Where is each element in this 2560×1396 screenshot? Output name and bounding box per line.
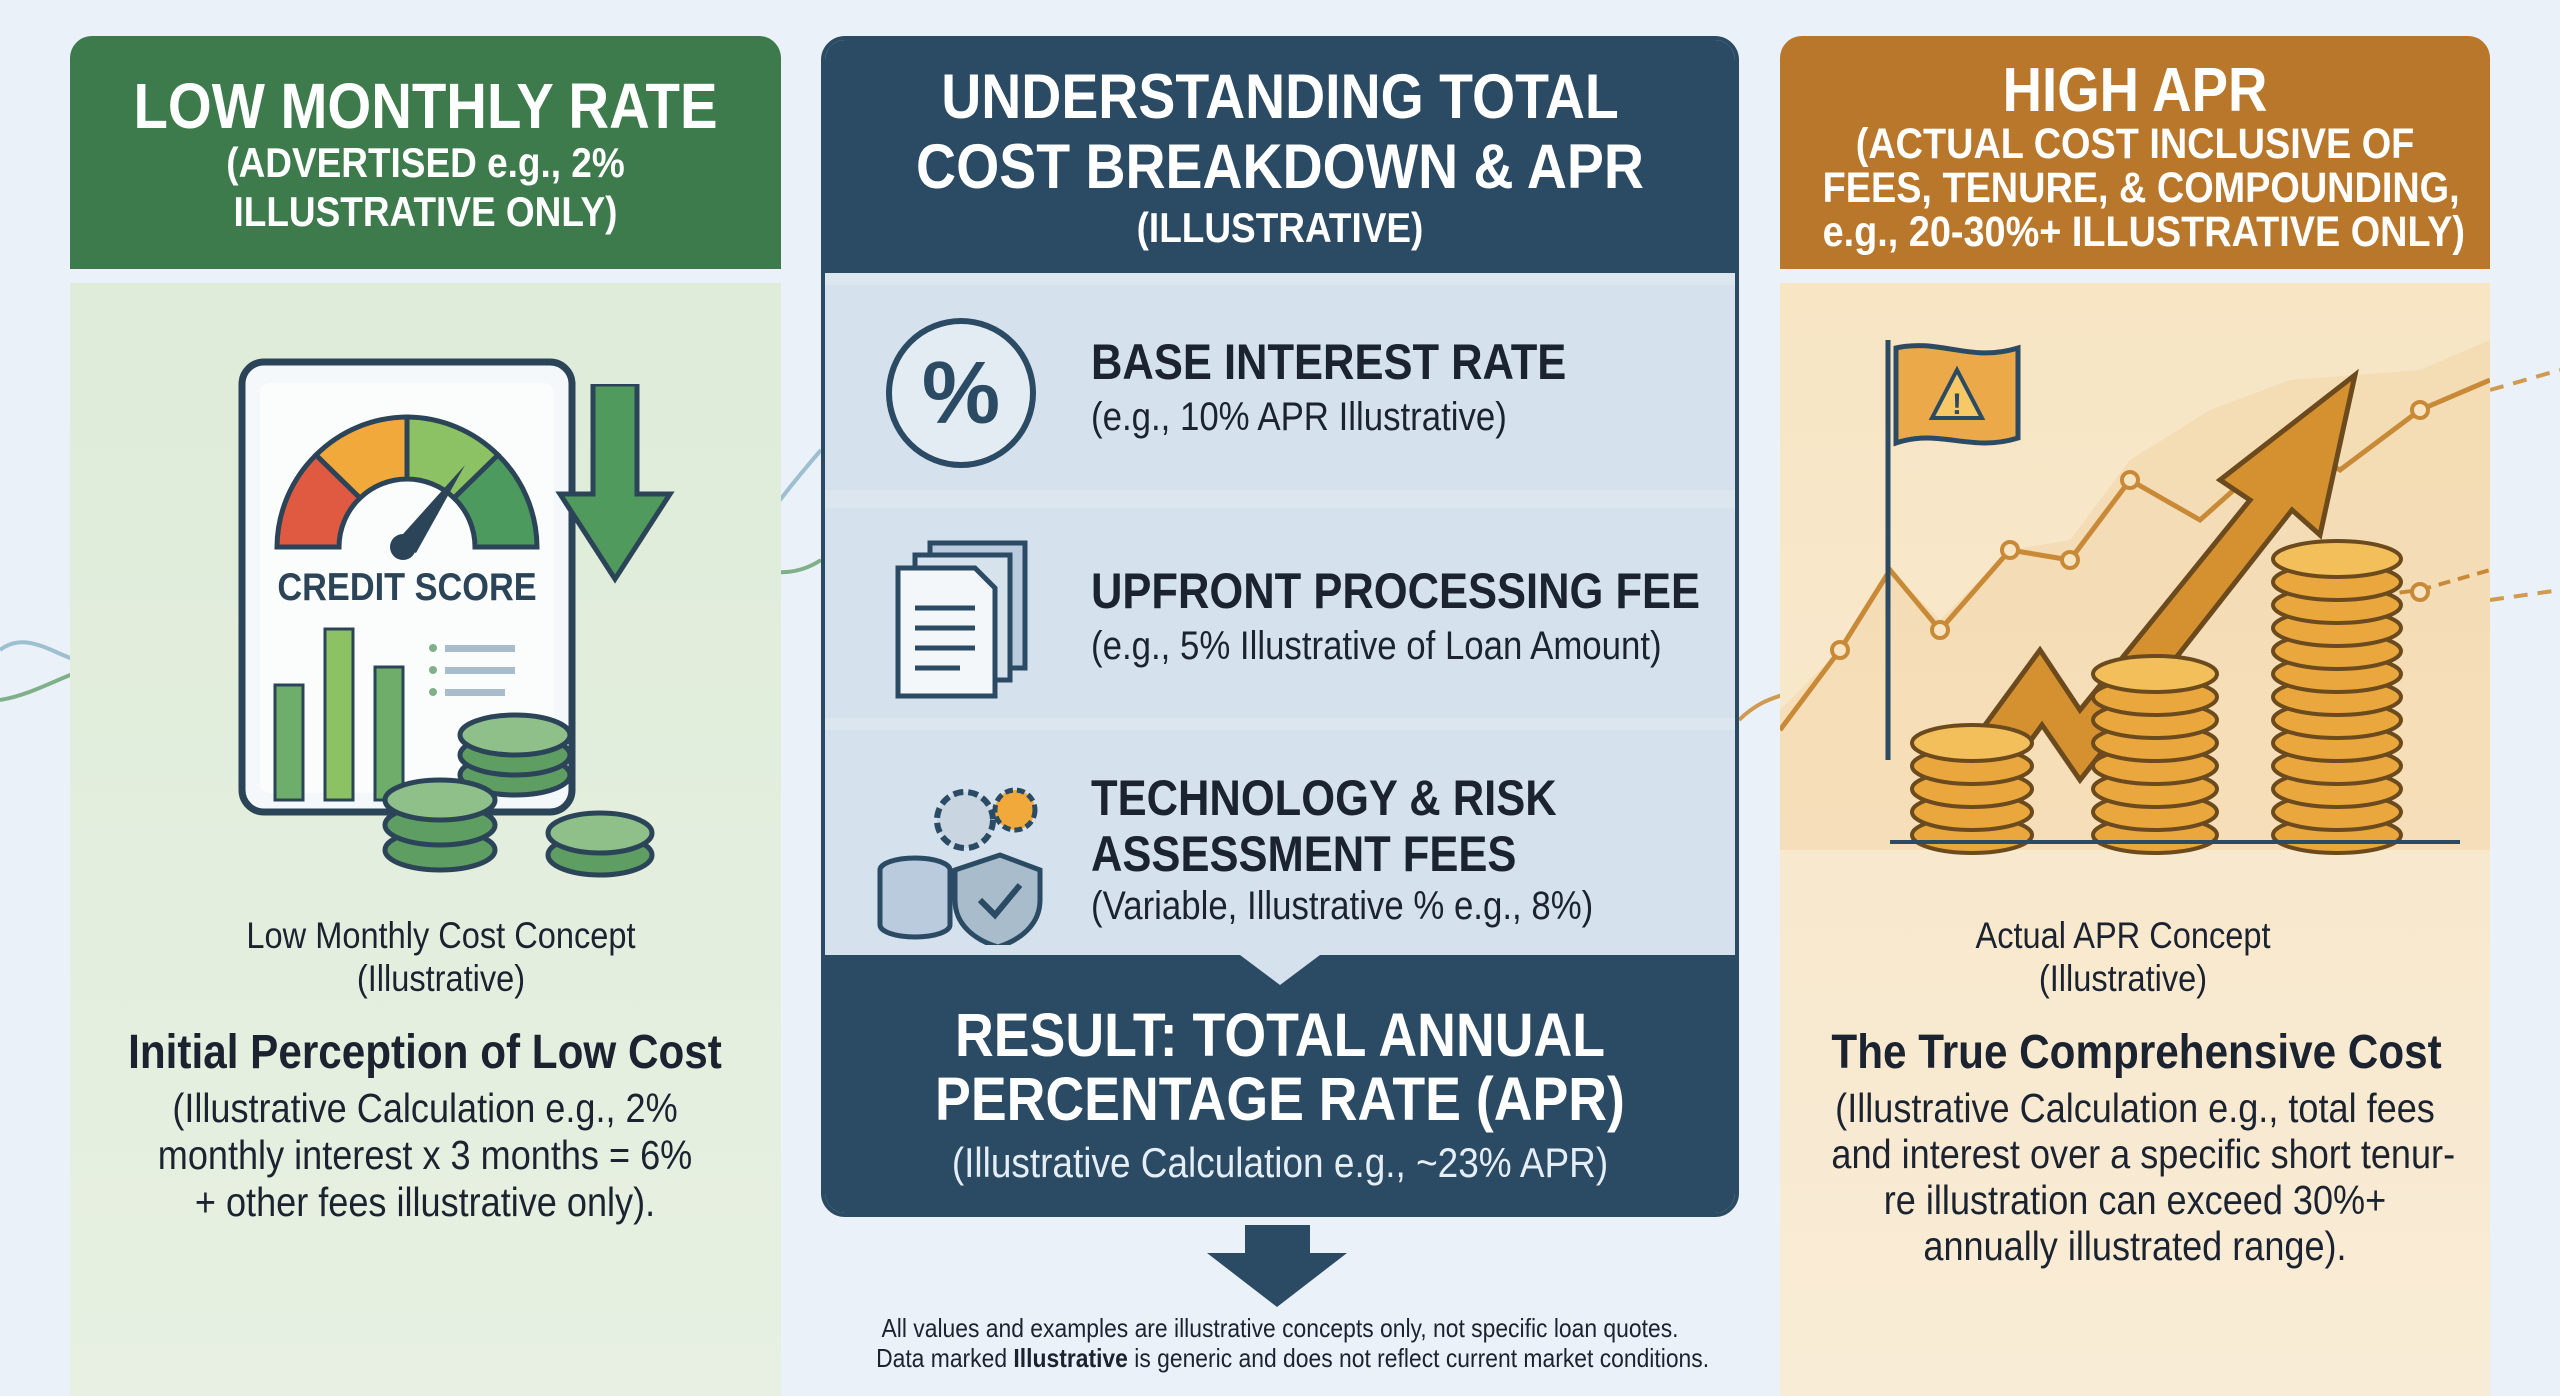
caption: low monthly cost concept: (Illustrative) [357,958,525,999]
text: BASE INTEREST RATE [1091,334,1566,390]
icon: percent: % [922,343,1000,442]
subtitle [226,139,625,235]
subtitle: (ILLUSTRATIVE) [1137,204,1423,251]
footnote: All values and examples are illustrative concepts only, not specific loan quotes. [881,1313,1678,1343]
text [1091,770,1593,928]
panel: understanding total cost breakdown [821,36,1739,1217]
header [1780,36,2490,269]
text: TECHNOLOGY & RISK [1091,770,1557,826]
text: (Variable, Illustrative % e.g., 8%) [1091,884,1593,928]
footnote: Data marked Illustrative is generic and does not reflect current market conditions. [876,1343,1709,1373]
panel: low monthly rate [70,36,781,1396]
result title [935,1001,1625,1133]
body: + other fees illustrative only). [195,1179,655,1225]
caption: actual apr concept [1975,915,2271,999]
row: technology & risk fees [825,730,1735,955]
coins [1912,541,2401,853]
title: COST BREAKDOWN & APR [916,132,1644,202]
text [1091,563,1700,668]
text block: initial perception [128,1026,722,1225]
body: monthly interest x 3 months = 6% [158,1132,692,1178]
result body: (Illustrative Calculation e.g., ~23% APR) [952,1139,1608,1186]
body: annually illustrated range). [1923,1223,2347,1269]
subtitle: (ADVERTISED e.g., 2% [226,139,625,186]
text: UPFRONT PROCESSING FEE [1091,563,1700,619]
subtitle: FEES, TENURE, & COMPOUNDING, [1823,164,2460,212]
icon: percent [886,318,1036,468]
flag [1886,340,1890,760]
subtitle: e.g., 20-30%+ ILLUSTRATIVE ONLY) [1823,208,2465,256]
icon: documents [896,540,1028,698]
row: upfront processing fee [825,508,1735,718]
title: LOW MONTHLY RATE [133,70,718,142]
text block: true comprehensive cost [1831,1026,2455,1269]
caption: low monthly cost concept: Low Monthly Cost Concept [246,915,636,956]
text: (e.g., 5% Illustrative of Loan Amount) [1091,624,1662,668]
big arrow [1930,375,2355,810]
heading: Initial Perception of Low Cost [128,1026,722,1079]
title: UNDERSTANDING TOTAL [941,62,1619,132]
body [1831,1085,2455,1269]
body: (Illustrative Calculation e.g., total fees [1835,1085,2435,1131]
body: (Illustrative Calculation e.g., 2% [172,1085,678,1131]
text: ASSESSMENT FEES [1091,826,1516,882]
coins [385,715,652,875]
chart: rising apr [1780,340,2490,855]
header: low monthly rate [70,36,781,269]
body: and interest over a specific short tenur- [1831,1131,2455,1177]
footnote [876,1313,1709,1373]
panel: high apr [1780,36,2490,1396]
chart: rising apr: ! [1952,388,1962,421]
icon: credit score device: CREDIT SCORE [277,565,537,608]
notch [1240,955,1320,985]
header [825,40,1735,273]
row: base interest rate [825,285,1735,490]
body [158,1085,692,1225]
subtitle [1823,120,2465,256]
result title: PERCENTAGE RATE (APR) [935,1065,1625,1133]
body background [1780,283,2490,1396]
heading: The True Comprehensive Cost [1831,1026,2442,1079]
icon: down arrow [556,384,674,584]
result title: RESULT: TOTAL ANNUAL [955,1001,1605,1069]
caption: low monthly cost concept [246,915,636,999]
subtitle: (ACTUAL COST INCLUSIVE OF [1856,120,2414,168]
subtitle: ILLUSTRATIVE ONLY) [233,188,617,235]
arrow: down to footnote [1207,1225,1347,1307]
body: re illustration can exceed 30%+ [1884,1177,2386,1223]
text [1091,334,1566,439]
caption: actual apr concept: (Illustrative) [2039,958,2207,999]
caption: actual apr concept: Actual APR Concept [1975,915,2271,956]
title: HIGH APR [2003,56,2267,125]
result section [825,955,1735,1225]
icon: gears database shield [878,788,1042,945]
title [916,62,1644,202]
icon: credit score device [238,358,654,878]
text: (e.g., 10% APR Illustrative) [1091,395,1507,439]
body background [70,283,781,1396]
